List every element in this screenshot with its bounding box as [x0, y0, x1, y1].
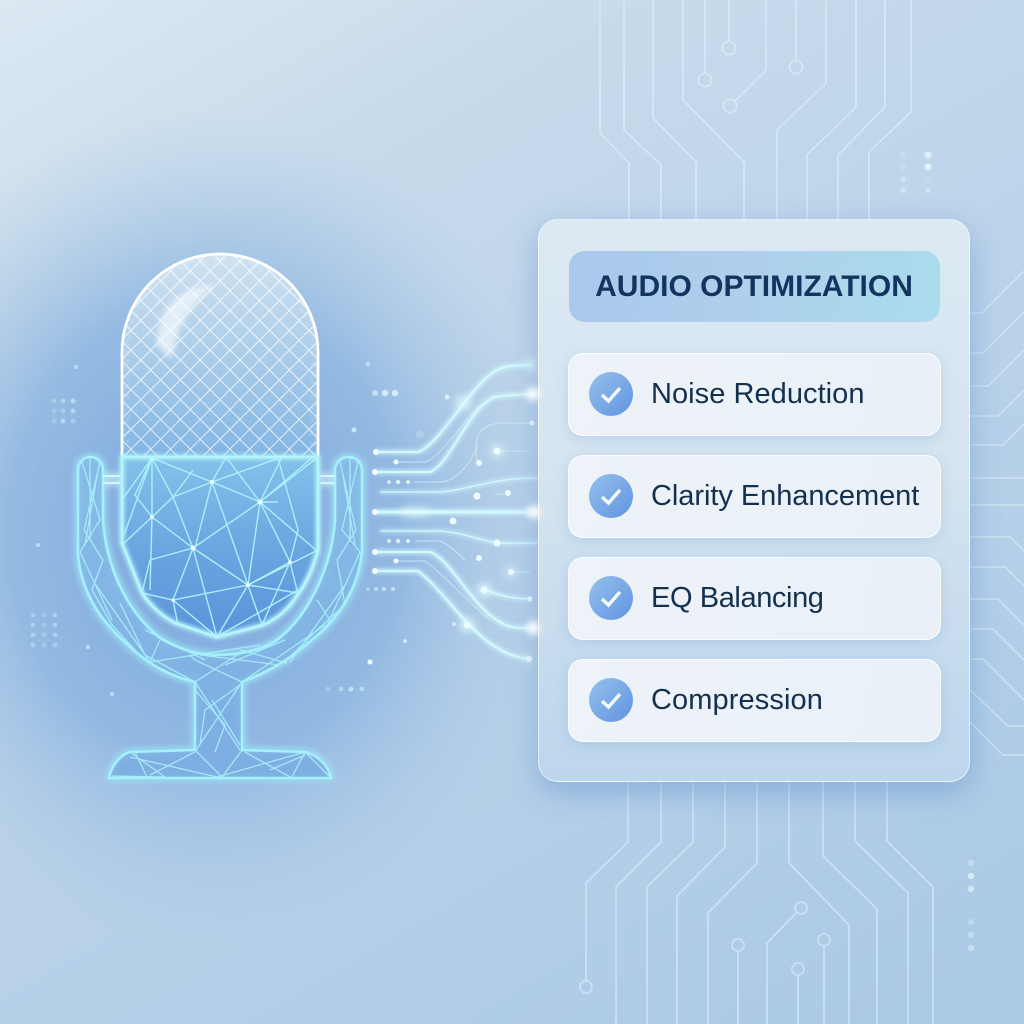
item: compression	[568, 659, 941, 742]
cradle wireframe	[80, 458, 360, 777]
circuit dots: bottom	[968, 860, 974, 951]
head highlight	[157, 285, 215, 360]
circuit traces: right	[968, 271, 1024, 755]
body wireframe	[122, 457, 318, 637]
signal nodes	[366, 390, 534, 664]
item: noise reduction: Noise Reduction	[651, 378, 865, 410]
microphone lower body	[120, 456, 320, 637]
item: clarity enhancement: Clarity Enhancement	[651, 480, 919, 512]
microphone cradle and stand	[78, 457, 362, 778]
circuit traces: top	[600, 0, 911, 219]
panel: audio optimization	[538, 219, 970, 782]
item: eq balancing	[568, 557, 941, 640]
circuit dots: top	[900, 152, 932, 193]
item: clarity enhancement	[568, 455, 941, 538]
microphone	[78, 250, 362, 778]
item: eq balancing: EQ Balancing	[651, 582, 824, 614]
item: compression: Compression	[651, 684, 823, 716]
item: noise reduction	[568, 353, 941, 436]
ambient dots around microphone	[30, 362, 372, 696]
circuit traces: bottom	[580, 780, 933, 1024]
signal glows	[399, 359, 538, 663]
signal traces from microphone to panel	[366, 359, 538, 664]
microphone head mesh	[120, 250, 320, 460]
panel heading: AUDIO OPTIMIZATION	[595, 270, 913, 303]
blue glow behind microphone	[0, 110, 565, 950]
panel heading	[569, 251, 940, 322]
